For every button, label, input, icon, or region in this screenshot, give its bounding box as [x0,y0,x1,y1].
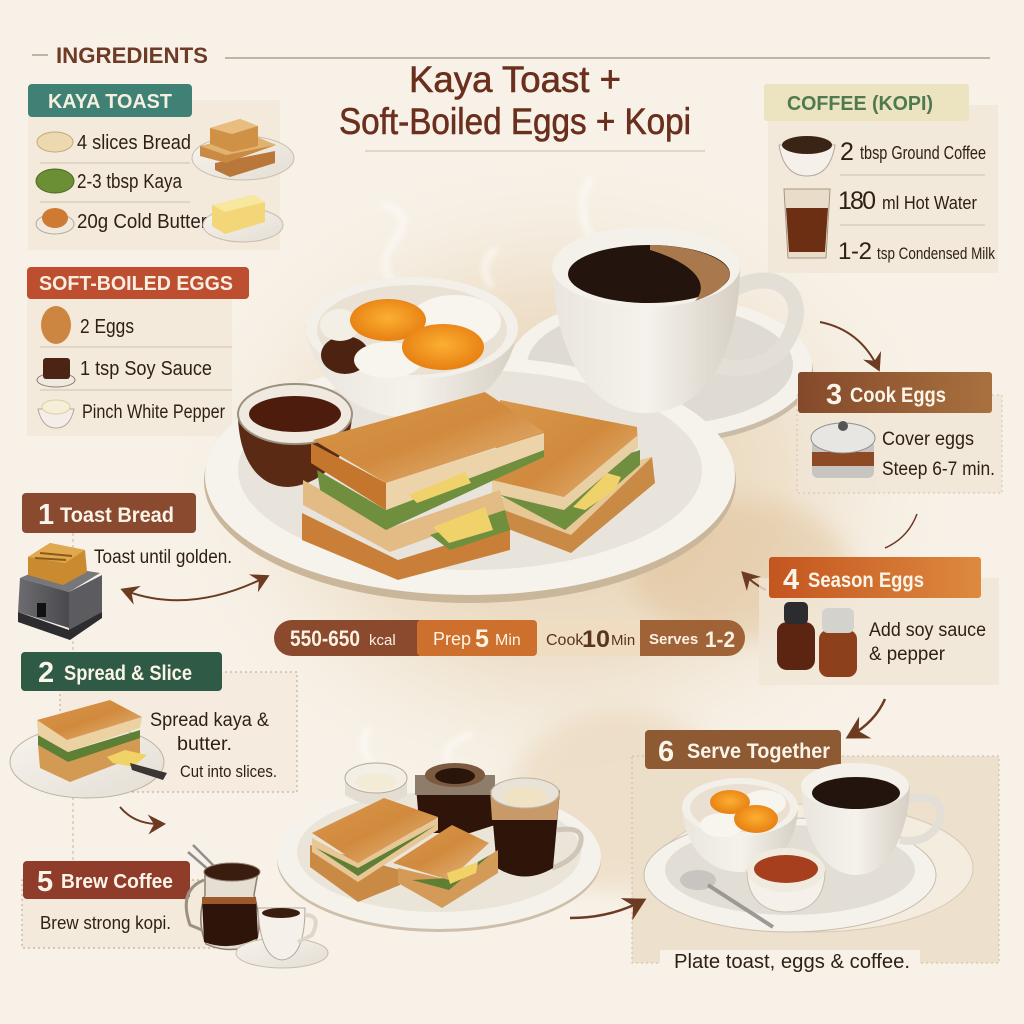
icon: pot [811,421,875,478]
arrow: into step 4 [744,574,766,590]
text: Add soy sauce [869,620,986,641]
panel: coffee ingredients [764,84,998,273]
step 3: cook eggs [797,372,1002,493]
text: condensed milk: tsp Condensed Milk [877,244,995,263]
text: condensed milk [838,238,995,265]
text: white pepper: Pinch White Pepper [82,402,226,423]
text: ground coffee: 2 [840,138,854,166]
stat: cook: Cook [546,632,584,649]
badge: Spread & Slice [64,662,192,685]
icon: sauce bottles [777,602,857,677]
badge: Serve Together [687,740,830,763]
arrow: step 2 to step 5 [120,807,162,824]
stat: cook: Min [611,632,635,649]
coffee jug [415,763,495,833]
text: Brew strong kopi. [40,913,171,933]
icon: bread [37,132,73,152]
step 6: serve together [632,730,999,974]
badge [23,861,190,899]
arrow: step 3 to step 4 [885,514,917,548]
badge [22,493,196,533]
heading: coffee [764,84,969,121]
text: Plate toast, eggs & coffee. [674,951,910,973]
icon: ground coffee bowl [779,136,835,176]
dip bowl [238,384,352,487]
spoon [680,870,773,927]
stat: serves: 1-2 [705,627,735,652]
icon: butter plate [203,195,283,242]
back plate [657,804,973,932]
icon: butter dish [36,208,74,234]
panel: ingredients heading: INGREDIENTS [56,43,208,68]
badge: 4 [783,564,799,596]
coffee glass [490,778,581,876]
badge: Cook Eggs [850,384,946,407]
stat: calories: kcal [369,632,396,649]
step 2: spread and slice [10,652,297,798]
panel: soft-boiled eggs ingredients [27,267,249,436]
arrow [126,577,266,600]
text: soy sauce: 1 tsp Soy Sauce [80,358,212,380]
cup [801,763,941,875]
icon: bread stack [192,119,294,180]
stat: serves: Serves [649,631,698,648]
stat: prep: Prep [433,629,471,649]
text: butter. [177,734,232,755]
badge: 3 [826,379,842,411]
sauce dish [747,848,825,912]
badge: Brew Coffee [61,871,173,893]
step 5: brew coffee [22,845,328,968]
text: ground coffee [840,138,986,166]
text: Spread kaya & [150,710,269,731]
text [869,620,986,665]
badge [21,652,222,691]
icon: egg [41,306,71,344]
text: hot water: 180 [838,187,876,215]
stat: prep: 5 [475,625,489,653]
steam [385,180,590,285]
text [150,710,277,781]
bowl [682,778,798,872]
text: Toast until golden. [94,547,232,568]
stat: cook: 10 [582,626,610,653]
illustration: second breakfast plate [277,730,601,932]
icon: white pepper [38,400,74,428]
text: condensed milk: 1-2 [838,238,872,265]
stat: serves [640,620,745,656]
egg bowl [305,277,518,418]
saucer [507,295,813,444]
icon: glass hot water [784,189,830,258]
heading: kaya toast: KAYA TOAST [48,91,172,113]
plate [277,785,601,932]
arrow: to serve [570,901,642,918]
illustration: hero breakfast [204,180,813,603]
front sandwich [302,392,544,580]
text: Cover eggs [882,429,974,450]
mini sandwiches [310,798,498,908]
heading: soft-boiled eggs: SOFT-BOILED EGGS [39,273,233,295]
icon: toaster [18,543,102,640]
heading: kaya toast [28,84,192,117]
coffee cup [552,227,796,413]
badge: 1 [38,499,54,531]
text: kaya: 2-3 tbsp Kaya [77,171,183,193]
front plate [644,818,936,932]
text: ground coffee: tbsp Ground Coffee [860,143,986,163]
stat: calories: 550-650 [290,626,360,651]
badge: Toast Bread [60,504,174,527]
title: Kaya Toast + [409,59,621,100]
text: hot water: ml Hot Water [882,193,977,213]
text: bread: 4 slices Bread [77,132,191,154]
icon: soy sauce [37,358,75,387]
icon: coffee pot and cup [186,845,328,968]
badge: 5 [37,866,53,898]
title: Soft-Boiled Eggs + Kopi [339,101,691,142]
stat: cook [537,620,642,656]
icon: sandwich on plate [10,700,167,798]
arrow: coffee to step 3 [820,322,878,368]
step 4: season eggs [759,557,999,685]
text: eggs: 2 Eggs [80,316,134,338]
icon: kaya [36,169,74,193]
text: & pepper [869,644,946,665]
milk cup [345,763,407,805]
stat: calories [274,620,420,656]
stat: prep: Min [495,632,521,649]
badge: 2 [38,657,54,689]
arrow: step 4 to step 6 [850,699,885,736]
stat: prep [417,620,537,656]
panel: kaya toast ingredients [28,84,294,250]
text: hot water [838,187,977,215]
badge: 6 [658,736,674,768]
steam [363,730,470,760]
text [882,429,995,480]
step 1: toast bread [18,493,266,640]
badge [798,372,992,413]
badge [769,557,981,598]
text: Cut into slices. [180,762,277,781]
badge [645,730,841,769]
main plate [204,357,736,603]
badge: Season Eggs [808,569,924,592]
text: butter: 20g Cold Butter [77,211,207,233]
title [225,58,990,151]
text: Steep 6-7 min. [882,459,995,480]
stats bar [274,620,745,656]
back sandwich [485,400,655,553]
heading: soft-boiled eggs [27,267,249,299]
heading: coffee: COFFEE (KOPI) [787,93,933,115]
